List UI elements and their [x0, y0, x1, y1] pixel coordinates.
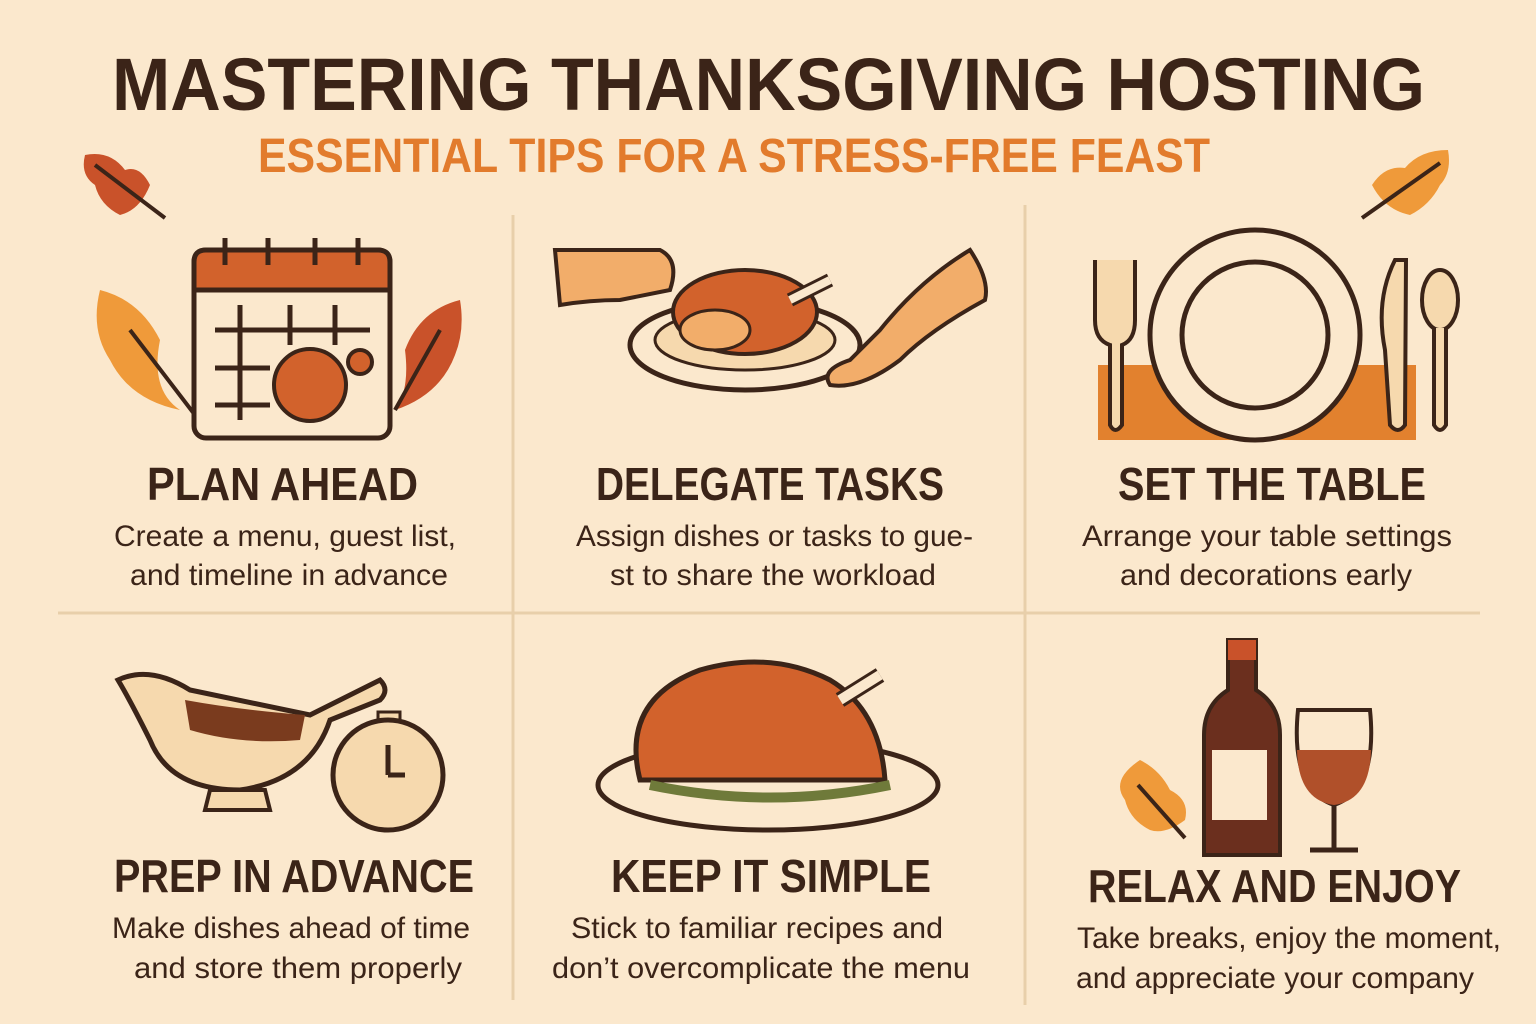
text: set the table: and decorations early — [1120, 559, 1412, 592]
text: keep it simple — [552, 912, 970, 985]
heading: keep it simple: KEEP IT SIMPLE — [611, 850, 931, 902]
text: relax and enjoy: and appreciate your company — [1076, 962, 1474, 995]
icon: gravy boat and timer — [118, 674, 443, 830]
text: plan ahead — [114, 520, 456, 592]
text: delegate tasks: st to share the workload — [610, 559, 936, 592]
heading: relax and enjoy: RELAX AND ENJOY — [1088, 860, 1461, 912]
text: keep it simple: Stick to familiar recipes and — [571, 912, 943, 945]
panel: relax and enjoy — [1076, 640, 1501, 995]
text: delegate tasks — [576, 520, 973, 592]
text: set the table: Arrange your table settings — [1082, 520, 1452, 553]
text: relax and enjoy: Take breaks, enjoy the moment, — [1077, 922, 1501, 955]
heading: prep in advance: PREP IN ADVANCE — [114, 850, 474, 902]
heading: set the table: SET THE TABLE — [1118, 458, 1426, 510]
subtitle: ESSENTIAL TIPS FOR A STRESS-FREE FEAST — [258, 130, 1210, 183]
panel: plan ahead — [97, 238, 462, 592]
icon: roast turkey — [598, 662, 938, 830]
text: plan ahead: Create a menu, guest list, — [114, 520, 456, 553]
text: set the table — [1082, 520, 1452, 592]
panel: delegate tasks — [555, 250, 986, 592]
icon: wine bottle and glass — [1120, 640, 1371, 855]
text: relax and enjoy — [1076, 922, 1501, 995]
panel: set the table — [1082, 230, 1458, 592]
panel: prep in advance — [112, 674, 474, 985]
text: keep it simple: don’t overcomplicate the menu — [552, 952, 970, 985]
icon: leaf top right — [1362, 150, 1449, 218]
text: prep in advance — [112, 912, 470, 985]
panel: keep it simple — [552, 662, 970, 985]
icon: hands with plate — [555, 250, 986, 390]
heading: plan ahead: PLAN AHEAD — [147, 458, 418, 510]
text: prep in advance: Make dishes ahead of time — [112, 912, 470, 945]
icon: calendar with leaves — [97, 238, 462, 438]
icon: place setting — [1095, 230, 1458, 440]
text: plan ahead: and timeline in advance — [130, 559, 448, 592]
text: prep in advance: and store them properly — [134, 952, 462, 985]
icon: leaf top left — [84, 154, 165, 218]
text: delegate tasks: Assign dishes or tasks to gue- — [576, 520, 973, 553]
title: MASTERING THANKSGIVING HOSTING — [112, 43, 1425, 126]
heading: delegate tasks: DELEGATE TASKS — [596, 458, 944, 510]
